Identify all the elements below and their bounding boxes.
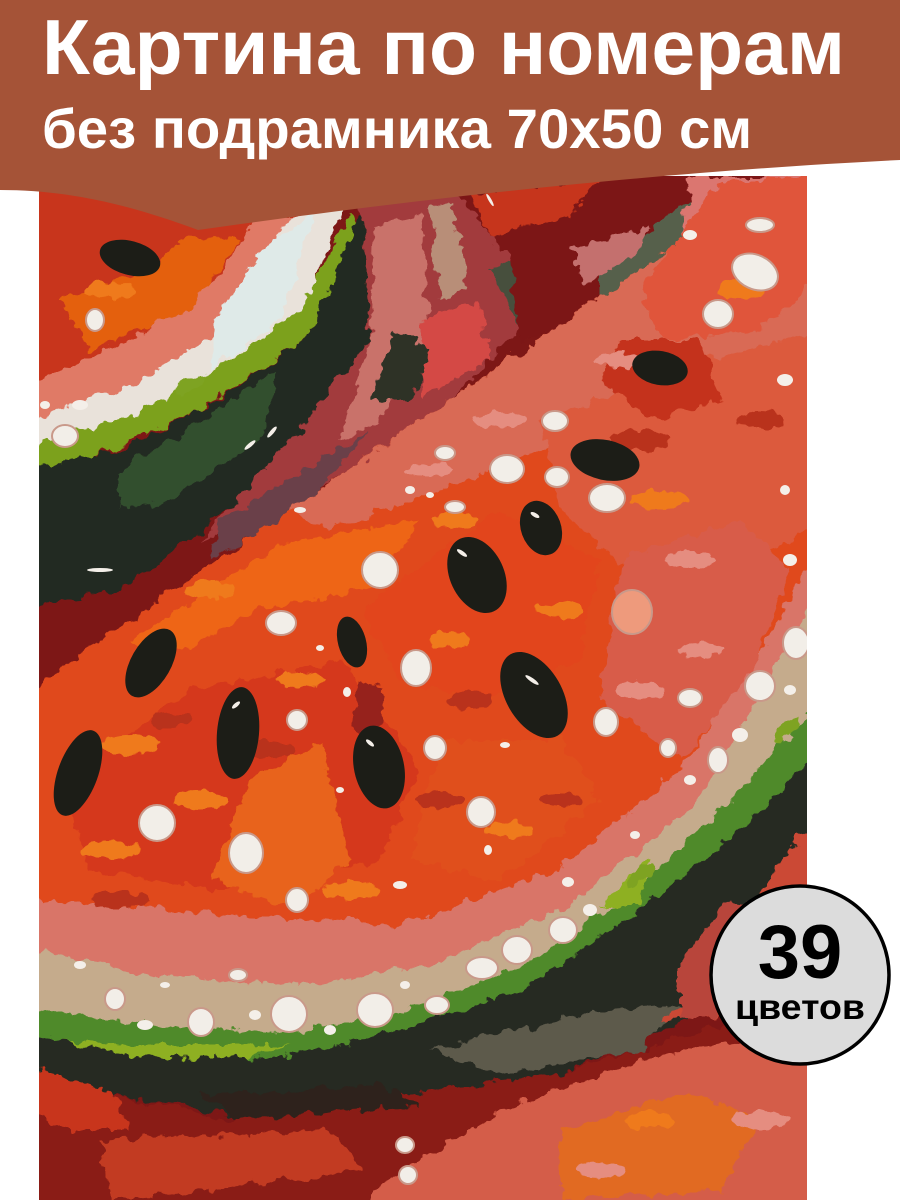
title: Картина по номерам [42, 3, 845, 91]
painting: watermelon slices [20, 170, 830, 1200]
subtitle: без подрамника 70х50 см [42, 97, 752, 160]
green rind edge [39, 712, 807, 1063]
badge: 39 colours [711, 886, 889, 1064]
dark rind of big slice [20, 740, 830, 1115]
seeds [44, 234, 691, 822]
beige rind [39, 608, 807, 1035]
big slice flesh [39, 251, 807, 930]
water droplets [52, 218, 809, 1184]
small speckles and seed highlights [40, 193, 797, 1035]
centre streak area [201, 196, 519, 560]
header banner [0, 0, 900, 230]
badge: 39 colours: 39 [758, 910, 842, 995]
top-left slice flesh [39, 192, 356, 468]
bottom slices [39, 1025, 740, 1200]
top-right dark red with streaks [460, 176, 801, 328]
badge: 39 colours: цветов [735, 988, 865, 1027]
right-hand red fragment [661, 832, 807, 1022]
dark rind of top-left slice [39, 215, 372, 607]
mottled paint patches [82, 281, 802, 1178]
